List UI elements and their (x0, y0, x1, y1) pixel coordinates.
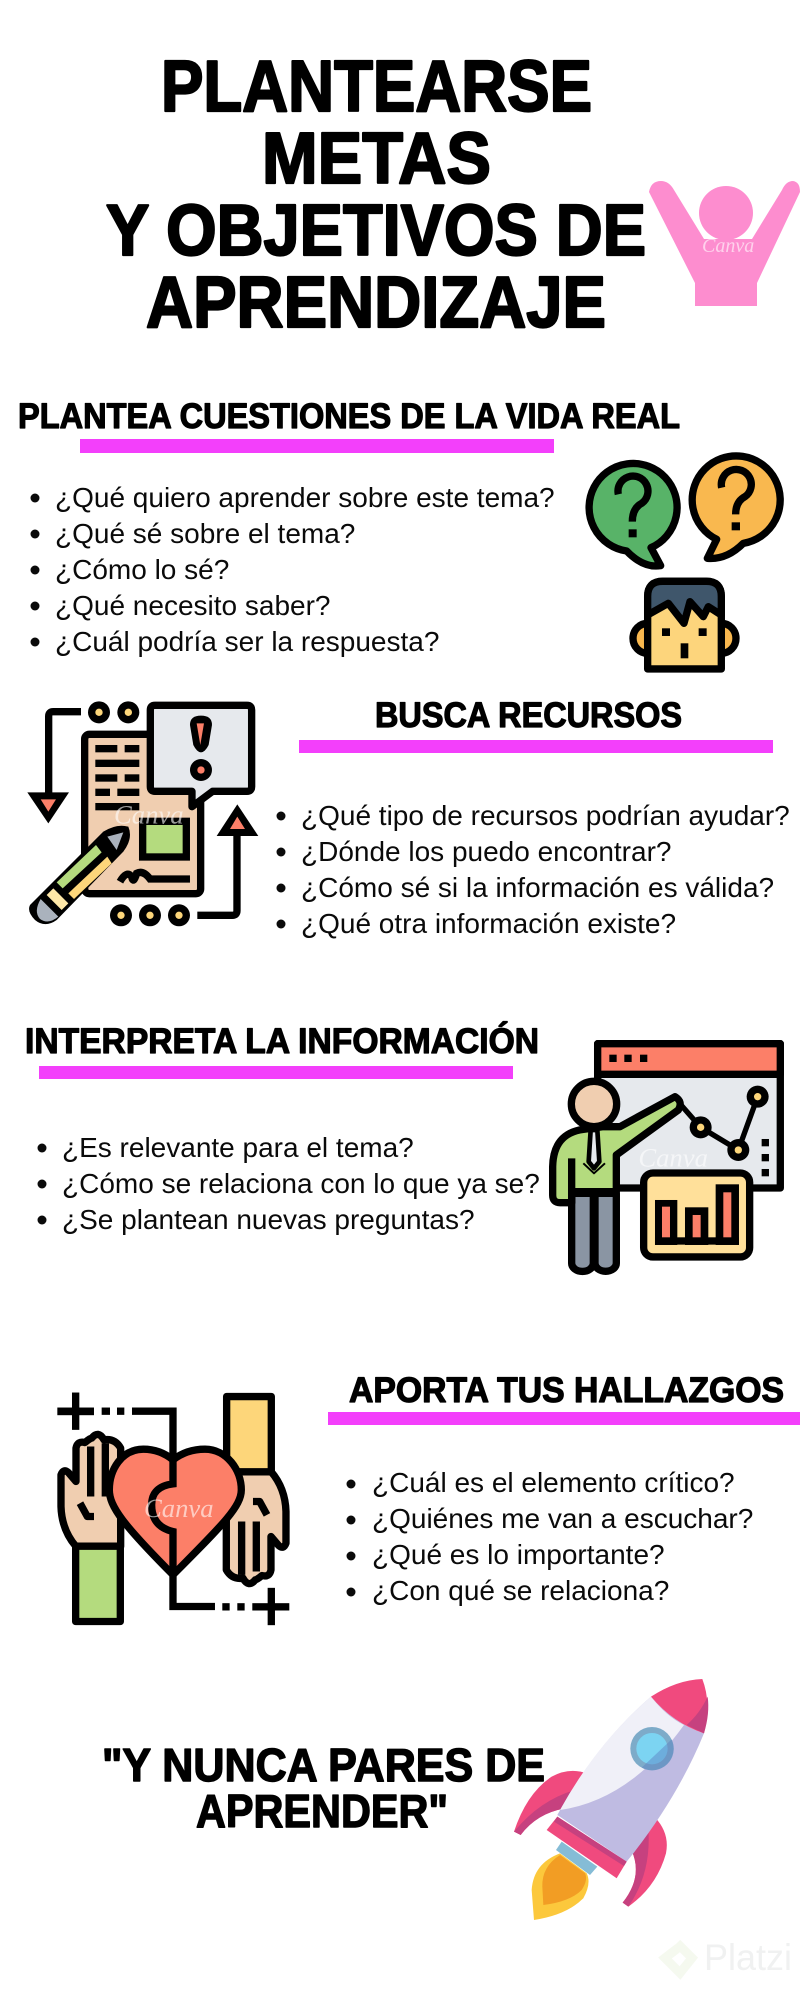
list: plantea cuestiones (30, 482, 555, 657)
closing quote: APRENDER" (196, 1785, 448, 1837)
list: plantea cuestiones: ¿Qué quiero aprender sobre este tema? (55, 482, 555, 513)
closing quote: "Y NUNCA PARES DE (102, 1739, 545, 1791)
list: plantea cuestiones: ¿Qué sé sobre el tema? (55, 518, 355, 549)
icon: rocket (514, 1679, 708, 1920)
icon: hands holding puzzle heart (57, 1393, 289, 1625)
list: interpreta la informacion: ¿Es relevante para el tema? (62, 1132, 414, 1163)
icon: document with pencil and alert (27, 701, 258, 926)
title: Y OBJETIVOS DE (106, 191, 646, 271)
list: aporta tus hallazgos: ¿Cuál es el elemento crítico? (372, 1467, 735, 1498)
underline bar 1 (80, 439, 554, 453)
platzi watermark: Platzi (704, 1937, 792, 1978)
heading: plantea cuestiones: PLANTEA CUESTIONES DE LA VIDA REAL (18, 397, 680, 436)
title (106, 47, 646, 343)
list: plantea cuestiones: ¿Cómo lo sé? (55, 554, 229, 585)
icon: document with pencil and alert: Canva (114, 799, 184, 829)
list: plantea cuestiones: ¿Qué necesito saber? (55, 590, 330, 621)
platzi watermark (665, 1937, 792, 1978)
icon: question bubbles and head (589, 456, 780, 669)
list: busca recursos (276, 800, 790, 939)
heading: interpreta la informacion: INTERPRETA LA INFORMACIÓN (25, 1021, 539, 1061)
list: aporta tus hallazgos (346, 1467, 753, 1606)
icon: pink person with raised arms: Canva (702, 235, 754, 257)
list: aporta tus hallazgos: ¿Qué es lo importante? (372, 1539, 665, 1570)
list: aporta tus hallazgos: ¿Con qué se relaciona? (372, 1575, 669, 1606)
icon: hands holding puzzle heart: Canva (144, 1493, 214, 1523)
list: interpreta la informacion (38, 1132, 540, 1235)
list: busca recursos: ¿Qué otra información existe? (301, 908, 676, 939)
list: interpreta la informacion: ¿Se plantean nuevas preguntas? (62, 1204, 475, 1235)
heading: aporta tus hallazgos: APORTA TUS HALLAZGOS (349, 1371, 784, 1410)
icon: presenter with charts (553, 1044, 780, 1271)
list: plantea cuestiones: ¿Cuál podría ser la respuesta? (55, 626, 439, 657)
underline bar 3 (39, 1066, 513, 1079)
title: APRENDIZAJE (146, 263, 606, 343)
list: busca recursos: ¿Dónde los puedo encontrar? (301, 836, 671, 867)
heading: busca recursos: BUSCA RECURSOS (375, 696, 682, 735)
underline bar 2 (299, 740, 773, 753)
title: PLANTEARSE (161, 47, 592, 127)
title: METAS (262, 119, 491, 199)
list: interpreta la informacion: ¿Cómo se relaciona con lo que ya se? (62, 1168, 540, 1199)
icon: pink person with raised arms (649, 181, 800, 306)
list: aporta tus hallazgos: ¿Quiénes me van a escuchar? (372, 1503, 753, 1534)
closing quote (102, 1739, 545, 1837)
underline bar 4 (328, 1412, 800, 1425)
list: busca recursos: ¿Qué tipo de recursos podrían ayudar? (301, 800, 790, 831)
icon: presenter with charts: Canva (638, 1143, 708, 1173)
list: busca recursos: ¿Cómo sé si la información es válida? (301, 872, 774, 903)
